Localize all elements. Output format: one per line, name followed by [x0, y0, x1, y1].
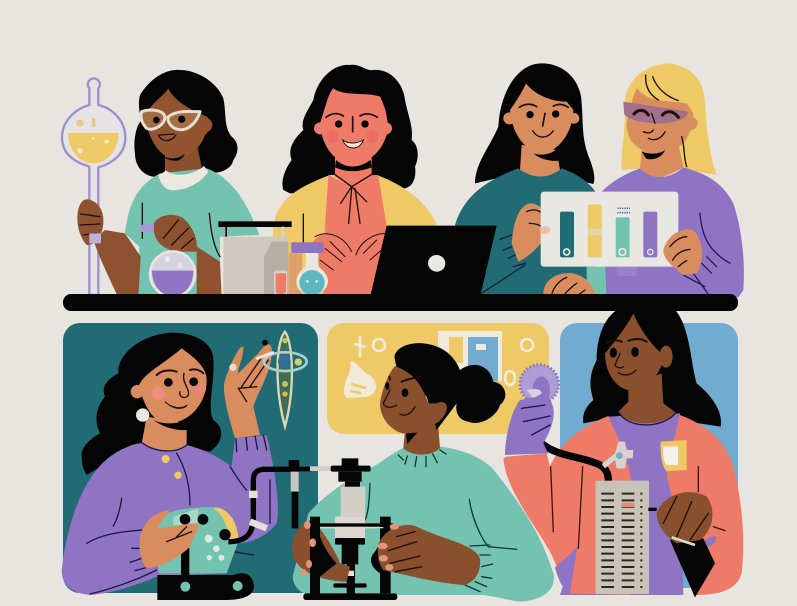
bar: yellow — [588, 204, 602, 257]
hand with black pouch — [648, 492, 716, 597]
hand on device — [140, 510, 198, 568]
person: scientist with goggles — [77, 70, 259, 297]
icon: grey lab container — [218, 221, 292, 297]
bottom-right panel: blue background — [560, 323, 738, 588]
icon: floating cell diagram — [257, 332, 307, 427]
bottom-left panel: teal background — [63, 323, 318, 593]
bar: teal — [560, 212, 574, 257]
person: blonde scientist with tinted glasses — [602, 63, 744, 297]
bench — [63, 294, 738, 311]
purple gloved hand with gear — [505, 365, 559, 455]
person: scientist in purple top — [62, 333, 278, 595]
top row: lab scientists behind the bench — [62, 65, 443, 297]
person: scientist with hair bun in mint sweater — [293, 343, 554, 602]
icon: purple round flask — [150, 251, 195, 297]
faint icon: symbols — [354, 336, 533, 385]
pocket — [661, 440, 687, 471]
tube connecting to microscope — [228, 460, 333, 542]
icon: blue round flask with purple cap — [289, 242, 328, 297]
faint icon: screen — [438, 331, 502, 381]
hands — [313, 231, 390, 271]
faint icon: organism — [344, 361, 376, 398]
laptop — [370, 226, 497, 297]
device held by scientist — [157, 507, 254, 600]
goggles — [141, 110, 200, 130]
icon: tall round flask with yellow liquid — [62, 78, 125, 295]
person: scientist in yellow cardigan — [270, 65, 443, 297]
bottom-middle panel: yellow background with faint science icons — [327, 323, 549, 434]
raised hand — [224, 340, 272, 438]
tinted glasses — [623, 102, 688, 140]
microscope — [303, 458, 397, 600]
person: scientist in coral cardigan — [503, 305, 743, 595]
person: scientist in teal sweater — [455, 63, 607, 297]
bar: mint — [616, 208, 630, 257]
tube and probe — [542, 442, 633, 482]
bar: purple — [643, 212, 657, 257]
hands on microscope — [292, 517, 480, 594]
hand holding board — [540, 226, 702, 275]
chart: bar chart board — [541, 192, 678, 267]
icon: rack device — [596, 481, 649, 594]
